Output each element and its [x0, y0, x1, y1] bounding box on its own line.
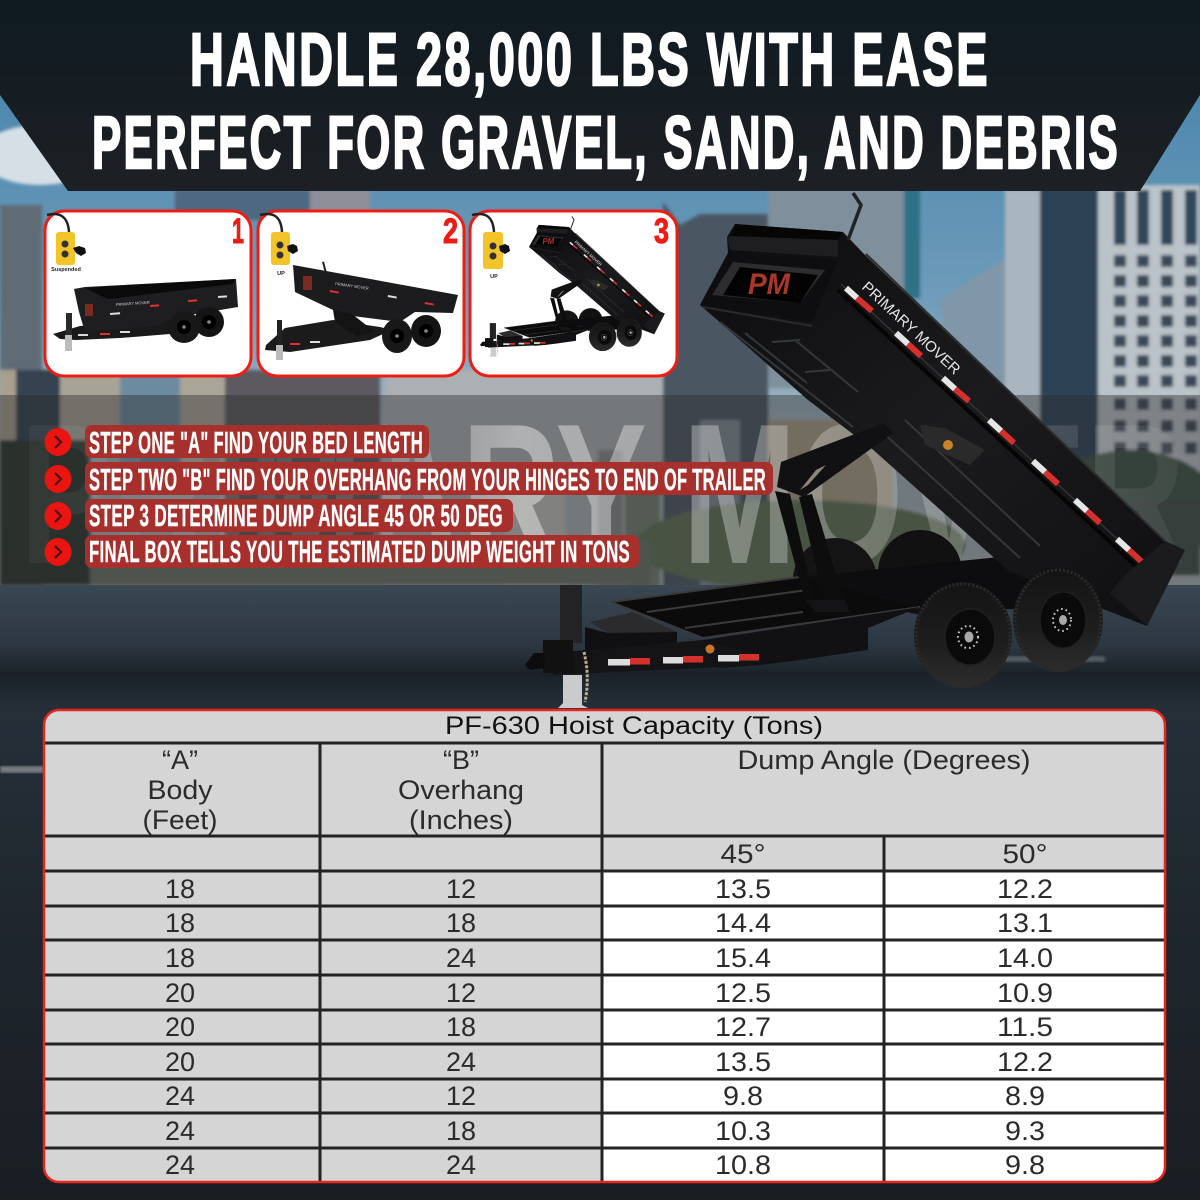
- hoist capacity table: [44, 710, 1165, 1182]
- row 4: 10.9: [997, 978, 1053, 1008]
- row 2: 14.4: [715, 908, 771, 938]
- row 9: 24: [165, 1150, 195, 1180]
- tailgate: [1110, 541, 1185, 626]
- side beam: [703, 607, 920, 668]
- row 3: 15.4: [715, 943, 771, 973]
- step 3: STEP 3 DETERMINE DUMP ANGLE 45 OR 50 DEG: [89, 498, 503, 533]
- column header: B Overhang: [398, 745, 524, 835]
- column header: B Overhang: Overhang: [398, 775, 524, 805]
- row 8: 10.3: [715, 1116, 771, 1146]
- number 3: 3: [654, 212, 669, 251]
- row 3: 18: [165, 943, 195, 973]
- frame reflector stripes: [608, 654, 759, 666]
- row 3: 24: [446, 943, 476, 973]
- title banner: [0, 0, 1200, 191]
- number 1: 1: [232, 212, 244, 251]
- tongue box: [590, 612, 677, 633]
- sub header: 50 degrees: 50°: [1002, 839, 1048, 869]
- step 1: [44, 425, 429, 460]
- row 5: [165, 1012, 1053, 1042]
- step 1: STEP ONE "A" FIND YOUR BED LENGTH: [89, 425, 423, 460]
- row 2: [165, 908, 1053, 938]
- deck frame: [553, 555, 1100, 675]
- small trailer raised: [480, 216, 665, 357]
- row 5: 20: [165, 1012, 195, 1042]
- row 8: 24: [165, 1116, 195, 1146]
- row 9: 24: [446, 1150, 476, 1180]
- row 1: 12.2: [997, 874, 1053, 904]
- brand text on bed: PRIMARY MOVER: [858, 278, 964, 378]
- step 2: [44, 462, 773, 497]
- row 9: 9.8: [1005, 1150, 1045, 1180]
- row 2: 18: [446, 908, 476, 938]
- step 4: [44, 534, 639, 569]
- row 5: 11.5: [997, 1012, 1053, 1042]
- row 4: 12.5: [715, 978, 771, 1008]
- row 5: 18: [446, 1012, 476, 1042]
- icon: yellow control pendant: [472, 214, 510, 269]
- label: Suspended: Suspended: [51, 267, 81, 273]
- column header: Dump Angle: Dump Angle (Degrees): [738, 745, 1030, 775]
- step list: [44, 425, 773, 569]
- row 6: 24: [446, 1047, 476, 1077]
- underside ribs: [720, 322, 1040, 558]
- tongue, jack and chain: [525, 585, 588, 708]
- rear tires behind hoist: [793, 530, 962, 622]
- row 2: 13.1: [997, 908, 1053, 938]
- side amber light: [920, 425, 985, 465]
- icon: yellow control pendant: [47, 214, 86, 265]
- dump bed: [700, 193, 1185, 626]
- table title: PF-630 Hoist Capacity (Tons): [445, 712, 823, 740]
- row 7: [165, 1081, 1045, 1111]
- row 7: 24: [165, 1081, 195, 1111]
- row 3: [165, 943, 1053, 973]
- step 4: FINAL BOX TELLS YOU THE ESTIMATED DUMP WEIGHT IN TONS: [89, 534, 630, 569]
- row 4: 12: [446, 978, 476, 1008]
- small trailer partly raised: [265, 261, 458, 360]
- icon: yellow control pendant: [260, 214, 298, 265]
- panel: step 1 trailer lowered: [45, 211, 251, 376]
- panel: step 2 trailer partly raised: [258, 211, 464, 376]
- row 5: 12.7: [715, 1012, 771, 1042]
- row 8: [165, 1116, 1045, 1146]
- column header: B Overhang: “B”: [443, 745, 479, 775]
- column header: A Body: [142, 745, 218, 835]
- row 4: [165, 978, 1053, 1008]
- sub header: 45 degrees: 45°: [720, 839, 766, 869]
- main image: raised dump trailer: [525, 193, 1185, 708]
- small trailer lowered: [53, 279, 238, 351]
- row 6: 12.2: [997, 1047, 1053, 1077]
- number 2: 2: [443, 212, 458, 251]
- row 1: 18: [165, 874, 195, 904]
- side stripes: [846, 288, 1142, 562]
- row 2: 18: [165, 908, 195, 938]
- scissor hoist: [775, 423, 893, 612]
- column header: B Overhang: (Inches): [409, 805, 513, 835]
- row 6: 20: [165, 1047, 195, 1077]
- row 4: 20: [165, 978, 195, 1008]
- row 6: [165, 1047, 1053, 1077]
- row 7: 12: [446, 1081, 476, 1111]
- row 6: 13.5: [715, 1047, 771, 1077]
- column header: A Body: “A”: [162, 745, 198, 775]
- panel: step 3 trailer fully raised: [470, 211, 677, 376]
- rear wheel: [1013, 568, 1103, 672]
- row 7: 9.8: [723, 1081, 763, 1111]
- row 9: [165, 1150, 1045, 1180]
- row 1: 12: [446, 874, 476, 904]
- PM logo: PM: [748, 268, 791, 301]
- step 3: [44, 498, 513, 533]
- column header: A Body: Body: [148, 775, 213, 805]
- column header: A Body: (Feet): [142, 805, 218, 835]
- row 8: 18: [446, 1116, 476, 1146]
- row 7: 8.9: [1005, 1081, 1045, 1111]
- row 9: 10.8: [715, 1150, 771, 1180]
- label: UP: UP: [490, 274, 498, 280]
- row 1: [165, 874, 1053, 904]
- front wheel: [914, 582, 1012, 688]
- small trailer partly raised: PRIMARY MOVER: [335, 281, 369, 291]
- label: UP: UP: [277, 271, 285, 277]
- small trailer lowered: PRIMARY MOVER: [116, 300, 150, 307]
- lever: [848, 193, 861, 240]
- row 8: 9.3: [1005, 1116, 1045, 1146]
- row 3: 14.0: [997, 943, 1053, 973]
- row 1: 13.5: [715, 874, 771, 904]
